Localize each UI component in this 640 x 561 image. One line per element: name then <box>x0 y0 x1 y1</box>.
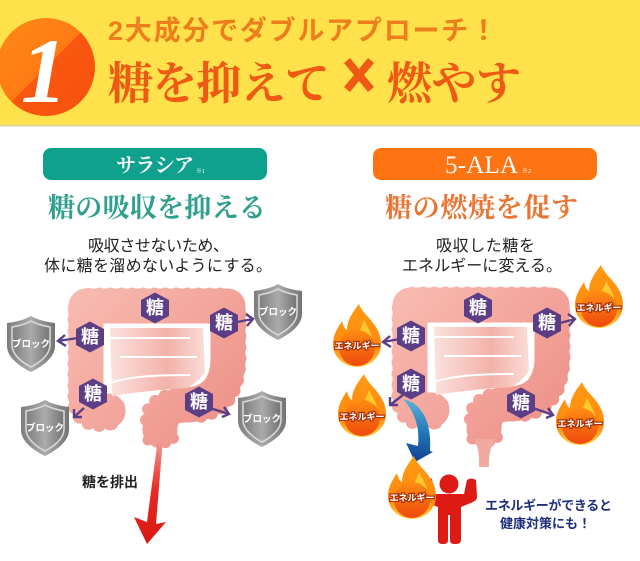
5-ALA label pill <box>373 148 597 180</box>
header band <box>0 0 640 126</box>
block arrows <box>58 314 253 417</box>
sugar hexagons: 糖 <box>469 298 487 318</box>
salacia description: 吸収させないため、 <box>88 237 229 255</box>
red person <box>423 474 477 544</box>
block shields <box>7 284 302 456</box>
sugar hexagons <box>397 292 561 418</box>
5-ALA description <box>402 237 562 275</box>
energy flames: エネルギー <box>334 341 380 351</box>
sugar hexagons: 糖 <box>84 384 102 404</box>
red excretion arrow <box>134 438 166 544</box>
energy flames <box>333 265 623 519</box>
sugar hexagons: 糖 <box>402 374 420 394</box>
sugar hexagons: 糖 <box>146 298 164 318</box>
salacia description: 体に糖を溜めないようにする。 <box>44 257 272 275</box>
main title <box>108 47 521 112</box>
main title: 燃やす <box>386 47 521 112</box>
sugar hexagons: 糖 <box>512 393 530 413</box>
sugar hexagons: 糖 <box>81 327 99 347</box>
5-ALA description: エネルギーに変える。 <box>402 257 562 275</box>
number badge: 1 <box>21 20 67 122</box>
block shields: ブロック <box>259 306 297 318</box>
energy message: エネルギーができると <box>485 498 612 513</box>
header subtitle: 2大成分でダブルアプローチ！ <box>108 15 497 46</box>
block shields: ブロック <box>243 413 281 425</box>
sugar hexagons <box>76 292 238 418</box>
conversion arrows <box>383 314 575 418</box>
energy flames: エネルギー <box>389 493 435 503</box>
5-ALA label pill: 5-ALA <box>445 152 518 179</box>
block shields: ブロック <box>12 338 50 350</box>
sugar hexagons: 糖 <box>215 313 233 333</box>
salacia label pill <box>43 148 267 180</box>
block shields: ブロック <box>26 422 64 434</box>
5-ALA label pill: ※2 <box>522 168 531 175</box>
sugar hexagons: 糖 <box>190 392 208 412</box>
number badge <box>0 18 95 122</box>
energy flames: エネルギー <box>576 303 622 313</box>
label: excretion: 糖を排出 <box>82 474 138 490</box>
salacia label pill: ※1 <box>196 168 205 175</box>
intestine illustration <box>74 294 240 443</box>
energy flames: エネルギー <box>557 419 603 429</box>
sugar hexagons: 糖 <box>402 326 420 346</box>
panel: salacia <box>7 148 302 544</box>
5-ALA description: 吸収した糖を <box>436 237 535 255</box>
energy message: 健康対策にも！ <box>500 516 591 531</box>
5-ALA heading: 糖の燃焼を促す <box>385 193 578 223</box>
intestine illustration <box>398 293 564 467</box>
salacia description <box>44 237 272 275</box>
energy flames: エネルギー <box>339 412 385 422</box>
blue arrow to person <box>403 399 433 462</box>
main title: 糖を抑えて <box>108 47 330 112</box>
salacia label pill: サラシア <box>116 155 194 177</box>
sugar hexagons: 糖 <box>538 313 556 333</box>
salacia heading: 糖の吸収を抑える <box>48 193 266 223</box>
panel: 5-ALA <box>333 148 623 544</box>
energy message <box>485 498 612 531</box>
